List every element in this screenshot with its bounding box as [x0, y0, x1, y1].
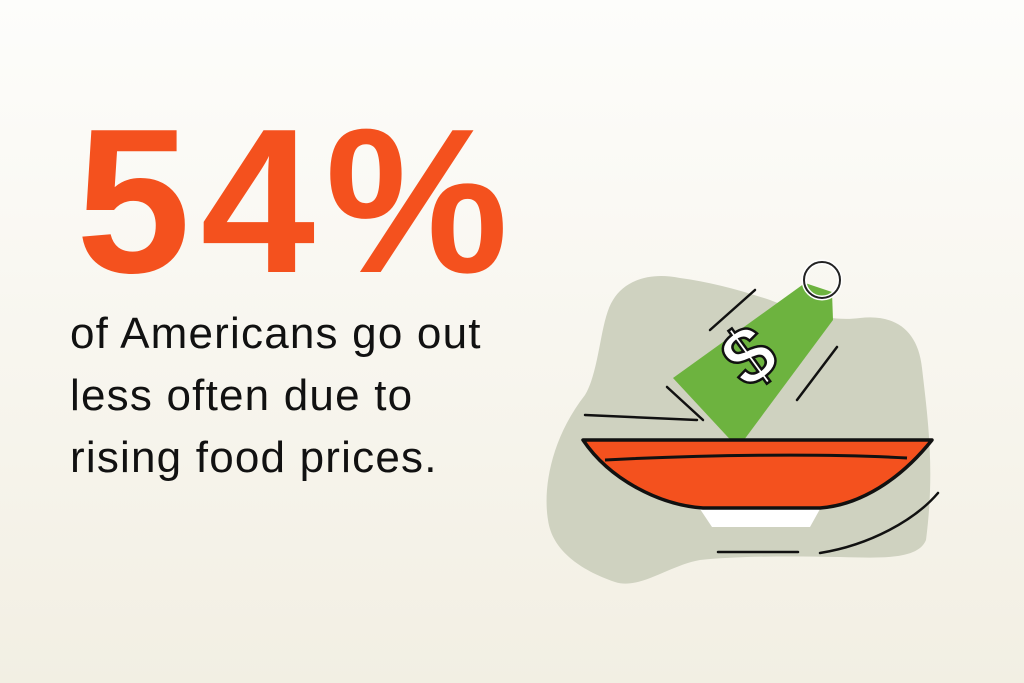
- price tag: [673, 262, 840, 448]
- motion lines: [585, 290, 938, 553]
- bowl: [583, 440, 932, 527]
- description text: rising food prices.: [70, 433, 438, 482]
- description text: of Americans go out: [70, 309, 482, 358]
- description text: less often due to: [70, 371, 413, 420]
- description text: [70, 309, 482, 482]
- background blob: [547, 276, 930, 584]
- price tag: $: [705, 306, 793, 405]
- headline stat: 54%: [76, 86, 518, 316]
